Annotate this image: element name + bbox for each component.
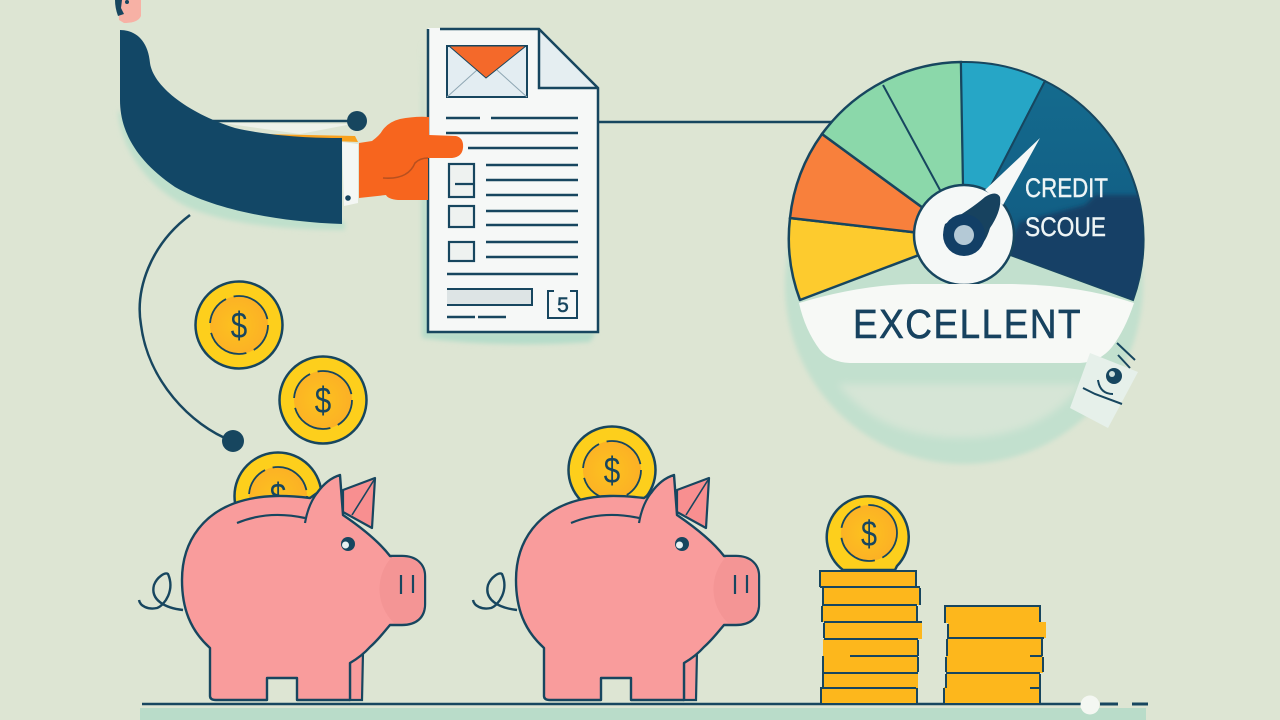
document bbox=[422, 28, 598, 344]
document shadow bbox=[422, 40, 596, 344]
far leg bbox=[350, 652, 363, 700]
ear crease bbox=[305, 493, 317, 523]
connector: arm to dot bbox=[213, 111, 367, 134]
page bbox=[428, 28, 598, 332]
coin 2 bbox=[280, 356, 366, 444]
document text lines bbox=[446, 118, 578, 317]
gauge needle bbox=[943, 138, 1040, 256]
label: credit score: SCOUE bbox=[1025, 212, 1106, 242]
coin 3 entering piggy bank: $ bbox=[270, 477, 287, 518]
stamp bbox=[548, 291, 577, 318]
coin on tall stack bbox=[827, 496, 909, 570]
tail bbox=[473, 574, 517, 610]
icon: eye tag bbox=[1070, 343, 1138, 428]
snout shading bbox=[713, 557, 758, 623]
ground line bbox=[140, 696, 1148, 720]
coin stack tall bbox=[820, 571, 922, 703]
nostrils bbox=[401, 575, 413, 594]
banner: excellent bbox=[799, 284, 1134, 363]
coin on tall stack: $ bbox=[861, 513, 877, 554]
stamp: 5 bbox=[557, 294, 569, 317]
arm with hand bbox=[118, 30, 463, 230]
hand bbox=[359, 117, 463, 200]
back crease bbox=[571, 515, 639, 523]
arm shadow bbox=[118, 110, 345, 230]
body bbox=[182, 475, 425, 700]
piggy bank right bbox=[473, 475, 759, 700]
segment: navy lower area bbox=[1012, 194, 1142, 276]
connector: document to gauge bbox=[596, 121, 832, 123]
eye bbox=[341, 537, 355, 551]
hand crease bbox=[383, 158, 428, 178]
far ear bbox=[343, 478, 375, 528]
coin 4 entering piggy bank: $ bbox=[604, 451, 621, 492]
segment: yellow bbox=[789, 218, 964, 300]
piggy bank left bbox=[139, 475, 425, 700]
head fragment at top bbox=[115, 0, 141, 23]
nostrils bbox=[735, 575, 747, 594]
segment: green bbox=[822, 62, 964, 238]
curved connector with dot bbox=[140, 215, 244, 452]
label: credit score bbox=[1025, 173, 1108, 242]
body bbox=[516, 475, 759, 700]
checkboxes bbox=[449, 164, 474, 261]
banner: excellent: EXCELLENT bbox=[853, 302, 1082, 347]
suit sleeve bbox=[120, 30, 342, 224]
summary bar bbox=[447, 289, 532, 305]
gauge shadow disc bbox=[785, 106, 1143, 464]
icon: envelope bbox=[447, 46, 527, 97]
gauge hub bbox=[914, 185, 1014, 285]
coin 4 entering piggy bank bbox=[568, 426, 656, 514]
segment: teal bbox=[961, 62, 1045, 238]
coin 1 bbox=[196, 282, 282, 368]
label: credit score: CREDIT bbox=[1025, 173, 1108, 203]
eye bbox=[675, 537, 689, 551]
coin stack short bbox=[944, 606, 1046, 703]
coin 1: $ bbox=[231, 306, 248, 347]
far leg bbox=[684, 652, 697, 700]
snout shading bbox=[379, 557, 424, 623]
shirt cuff bbox=[342, 142, 358, 206]
segment: dark blue bbox=[964, 81, 1144, 300]
coin 2: $ bbox=[315, 381, 332, 422]
ear crease bbox=[639, 493, 651, 523]
segment: orange bbox=[790, 134, 964, 238]
coin 3 entering piggy bank bbox=[234, 452, 322, 540]
far ear bbox=[677, 478, 709, 528]
credit score gauge bbox=[789, 62, 1150, 428]
back crease bbox=[237, 515, 305, 523]
orange sleeve edge bbox=[262, 134, 358, 142]
tail bbox=[139, 574, 183, 610]
